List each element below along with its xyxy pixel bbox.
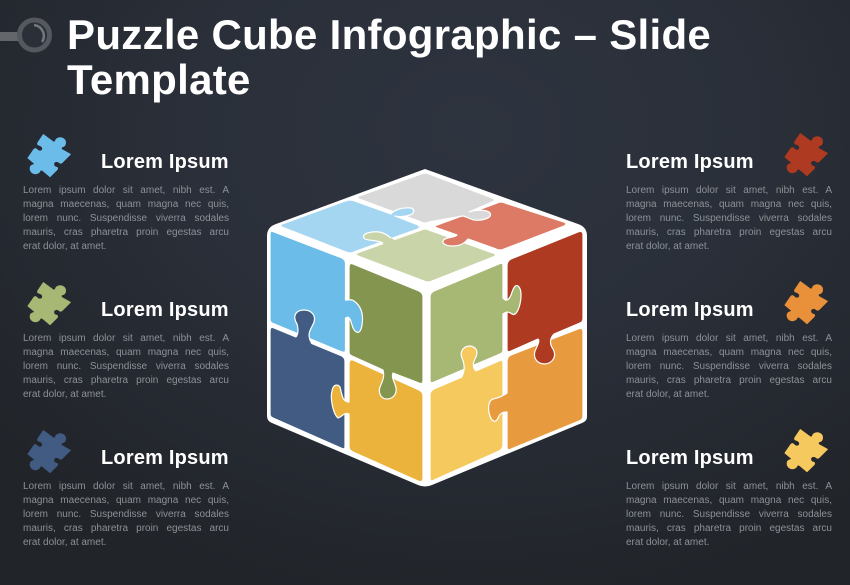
left face: yellow piece <box>331 360 423 482</box>
body text: mauris, cras pharetra proin egestas arcu <box>626 523 832 534</box>
title: Puzzle Cube Infographic – Slide <box>67 11 711 58</box>
body text <box>23 332 229 400</box>
top face: light blue piece <box>280 200 420 253</box>
right face: orange piece <box>489 328 583 450</box>
body text: mauris, cras pharetra proin egestas arcu <box>626 375 832 386</box>
left face: sky blue piece <box>270 231 363 352</box>
right face: light yellow piece <box>430 360 503 481</box>
heading: Lorem Ipsum <box>101 447 229 469</box>
body text: Lorem ipsum dolor sit amet, nibh est. A <box>23 332 229 344</box>
body text: lorem nunc. Suspendisse viverra sodales <box>23 361 229 372</box>
body text: Lorem ipsum dolor sit amet, nibh est. A <box>23 184 229 196</box>
top face: pale green piece <box>356 229 496 282</box>
body text: erat dolor, at amet. <box>626 389 709 400</box>
right face: light yellow tab <box>461 346 478 383</box>
body text: magna maecenas, quam magna nec quis, <box>626 495 832 506</box>
icon: green puzzle piece <box>28 283 70 325</box>
icon: orange puzzle piece <box>785 282 827 324</box>
left face: olive piece <box>349 264 423 399</box>
body text: mauris, cras pharetra proin egestas arcu <box>23 375 229 386</box>
heading: Lorem Ipsum <box>626 447 754 469</box>
logo icon <box>0 18 52 52</box>
body text: erat dolor, at amet. <box>626 241 709 252</box>
body text: magna maecenas, quam magna nec quis, <box>626 199 832 210</box>
left face: navy tab <box>295 310 315 350</box>
heading: Lorem Ipsum <box>101 151 229 173</box>
body text: Lorem ipsum dolor sit amet, nibh est. A <box>626 332 832 344</box>
body text: erat dolor, at amet. <box>23 537 106 548</box>
top face: gray piece <box>358 173 494 223</box>
body text <box>23 480 229 548</box>
body text: Lorem ipsum dolor sit amet, nibh est. A <box>626 184 832 196</box>
right block 3 <box>626 447 832 548</box>
body text: magna maecenas, quam magna nec quis, <box>23 347 229 358</box>
top face: coral piece <box>435 202 566 250</box>
left block 2 <box>23 299 229 400</box>
body text: lorem nunc. Suspendisse viverra sodales <box>626 361 832 372</box>
left block 1 <box>23 151 229 252</box>
right face: light green piece <box>430 263 521 383</box>
body text: magna maecenas, quam magna nec quis, <box>23 495 229 506</box>
right face: brick red piece <box>507 231 583 364</box>
body text <box>23 184 229 252</box>
body text: lorem nunc. Suspendisse viverra sodales <box>626 509 832 520</box>
body text: Lorem ipsum dolor sit amet, nibh est. A <box>23 480 229 492</box>
body text <box>626 332 832 400</box>
top face: pale green tab <box>363 232 396 247</box>
title <box>67 11 711 103</box>
body text: erat dolor, at amet. <box>23 241 106 252</box>
title: Template <box>67 56 251 103</box>
body text: mauris, cras pharetra proin egestas arcu <box>626 227 832 238</box>
icon: yellow puzzle piece <box>785 430 827 472</box>
body text: magna maecenas, quam magna nec quis, <box>626 347 832 358</box>
body text: lorem nunc. Suspendisse viverra sodales <box>23 509 229 520</box>
body text: mauris, cras pharetra proin egestas arcu <box>23 227 229 238</box>
cube outline <box>267 169 587 486</box>
left face: navy piece <box>270 327 345 449</box>
heading: Lorem Ipsum <box>626 151 754 173</box>
heading: Lorem Ipsum <box>626 299 754 321</box>
body text <box>626 480 832 548</box>
heading: Lorem Ipsum <box>101 299 229 321</box>
body text: magna maecenas, quam magna nec quis, <box>23 199 229 210</box>
icon: navy puzzle piece <box>28 431 70 473</box>
icon: red puzzle piece <box>785 134 827 176</box>
body text: Lorem ipsum dolor sit amet, nibh est. A <box>626 480 832 492</box>
body text <box>626 184 832 252</box>
right block 1 <box>626 151 832 252</box>
body text: mauris, cras pharetra proin egestas arcu <box>23 523 229 534</box>
icon: blue puzzle piece <box>28 135 70 177</box>
body text: erat dolor, at amet. <box>23 389 106 400</box>
body text: erat dolor, at amet. <box>626 537 709 548</box>
body text: lorem nunc. Suspendisse viverra sodales <box>626 213 832 224</box>
body text: lorem nunc. Suspendisse viverra sodales <box>23 213 229 224</box>
left block 3 <box>23 447 229 548</box>
right block 2 <box>626 299 832 400</box>
